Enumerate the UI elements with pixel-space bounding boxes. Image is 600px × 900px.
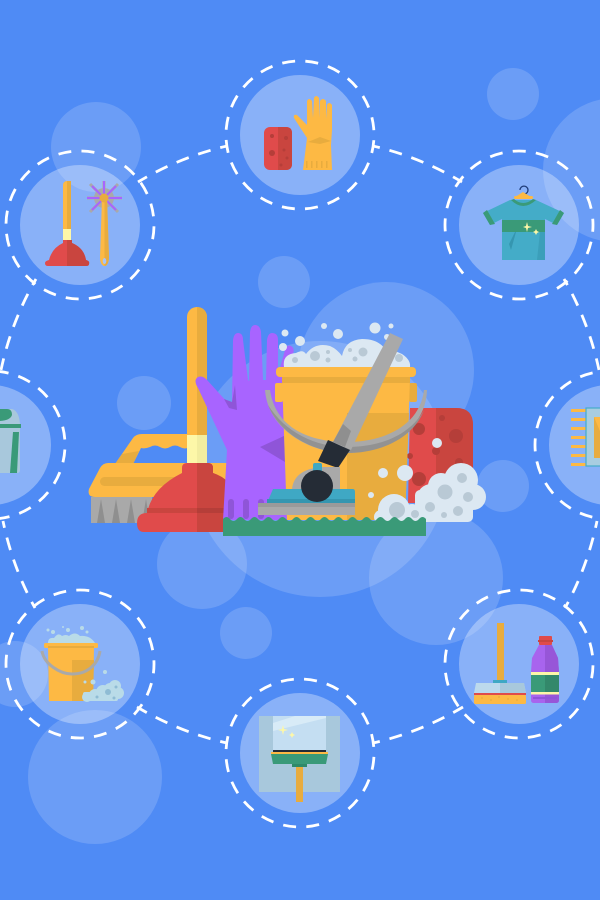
bucket handle (265, 390, 427, 453)
icon: window squeegee (259, 716, 340, 802)
icon: bucket with foam (42, 626, 124, 702)
yellow bucket (275, 367, 417, 520)
scrub brush (89, 434, 227, 523)
squeegee mop (258, 333, 403, 515)
central cleaning illustration (89, 307, 486, 536)
icon: framed rug (571, 408, 600, 466)
plunger (137, 307, 228, 532)
foam on right (368, 438, 486, 526)
foam on bucket (279, 322, 410, 367)
green mat (223, 517, 426, 536)
icon: mop and detergent bottle (474, 623, 559, 704)
icon: plunger and toilet brush (45, 181, 122, 266)
icon: sponge and glove (264, 96, 332, 170)
icon: t-shirt on hanger (483, 186, 564, 260)
icon: green trash bin (0, 409, 21, 473)
red sponge (407, 408, 473, 503)
purple glove (196, 325, 294, 520)
